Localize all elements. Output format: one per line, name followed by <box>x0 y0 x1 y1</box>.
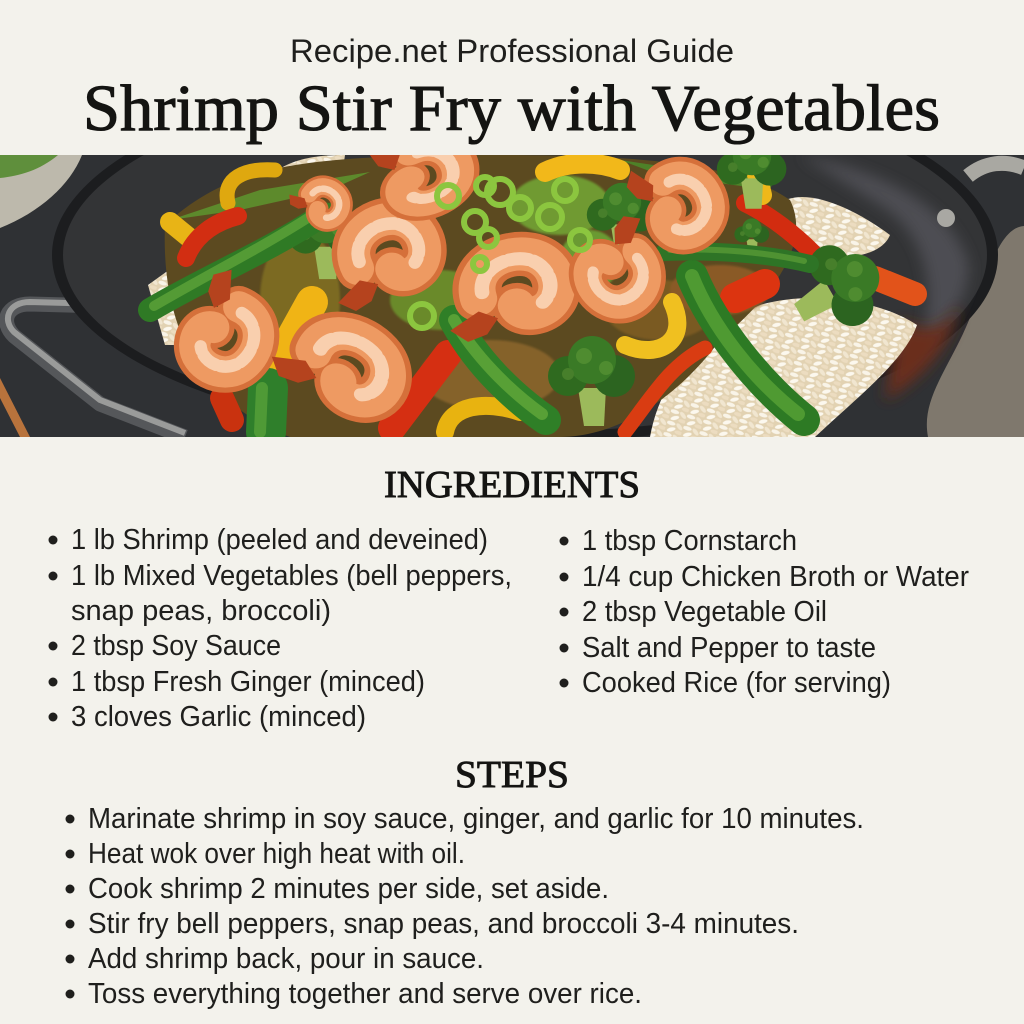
red pepper mid right <box>735 284 765 298</box>
yellow pepper top left <box>227 170 275 203</box>
chopsticks <box>0 378 30 437</box>
ingredients list left column: snap peas, broccoli) <box>71 595 331 627</box>
onion bits <box>170 172 370 220</box>
ingredients list left column: 1 lb Shrimp (peeled and deveined) <box>71 524 488 556</box>
steps list: Heat wok over high heat with oil. <box>88 838 465 870</box>
steps list: Add shrimp back, pour in sauce. <box>88 943 484 975</box>
steps list: Cook shrimp 2 minutes per side, set aside. <box>88 873 609 905</box>
hero photo: shrimp stir fry in wok <box>0 155 1024 437</box>
food base <box>165 155 796 437</box>
rice upper right <box>788 197 890 256</box>
rice top <box>282 155 345 168</box>
rice right <box>650 298 917 437</box>
ingredients list right column: 1 tbsp Cornstarch <box>582 525 797 557</box>
snap peas <box>150 214 810 432</box>
heading: steps: STEPS <box>455 754 569 796</box>
linen cloth <box>927 226 1024 437</box>
shrimp <box>172 263 284 383</box>
red pepper upper right <box>745 203 813 253</box>
ingredients list left column <box>48 524 512 733</box>
orange pepper right <box>875 278 915 294</box>
side bowl <box>0 155 82 228</box>
steps list <box>66 803 864 1010</box>
wok <box>52 155 998 437</box>
wok sheen <box>814 158 972 330</box>
mixed vegetable patches <box>260 175 770 410</box>
yellow pepper right <box>625 302 677 350</box>
yellow pepper left <box>170 222 192 240</box>
left wok handle <box>7 304 185 437</box>
peppers <box>170 164 915 432</box>
yellow pepper far upper <box>757 175 762 195</box>
yellow pepper top <box>545 164 620 172</box>
yellow pepper centre left <box>281 302 312 358</box>
rivets <box>937 209 955 227</box>
ingredients list right column: 2 tbsp Vegetable Oil <box>582 596 827 628</box>
subtitle: Recipe.net Professional Guide <box>290 33 734 69</box>
rice left <box>148 272 178 345</box>
counter background <box>0 155 1024 437</box>
red pepper bottom left <box>222 398 232 420</box>
ingredients list left column: 3 cloves Garlic (minced) <box>71 701 366 733</box>
red pepper left <box>186 216 238 258</box>
ingredients list right column: Cooked Rice (for serving) <box>582 667 891 699</box>
broccoli <box>548 336 635 426</box>
steps list: Stir fry bell peppers, snap peas, and broccoli 3-4 minutes. <box>88 908 799 940</box>
ingredients list left column: 2 tbsp Soy Sauce <box>71 630 281 662</box>
green onion rings <box>410 177 590 328</box>
heading: ingredients: INGREDIENTS <box>384 464 640 506</box>
title: Shrimp Stir Fry with Vegetables <box>83 72 940 145</box>
wok red reflection <box>885 305 960 400</box>
ingredients list left column: 1 lb Mixed Vegetables (bell peppers, <box>71 560 512 592</box>
right wok handle <box>968 163 1024 176</box>
steps list: Toss everything together and serve over rice. <box>88 978 642 1010</box>
ingredients list right column <box>560 525 969 699</box>
yellow pepper bottom <box>445 406 520 432</box>
ingredients list right column: Salt and Pepper to taste <box>582 632 876 664</box>
ingredients list left column: 1 tbsp Fresh Ginger (minced) <box>71 666 425 698</box>
ingredients list right column: 1/4 cup Chicken Broth or Water <box>582 561 969 593</box>
red pepper bottom right <box>625 348 705 432</box>
bowl greens <box>0 155 58 178</box>
red pepper centre <box>392 354 448 428</box>
steps list: Marinate shrimp in soy sauce, ginger, and garlic for 10 minutes. <box>88 803 864 835</box>
